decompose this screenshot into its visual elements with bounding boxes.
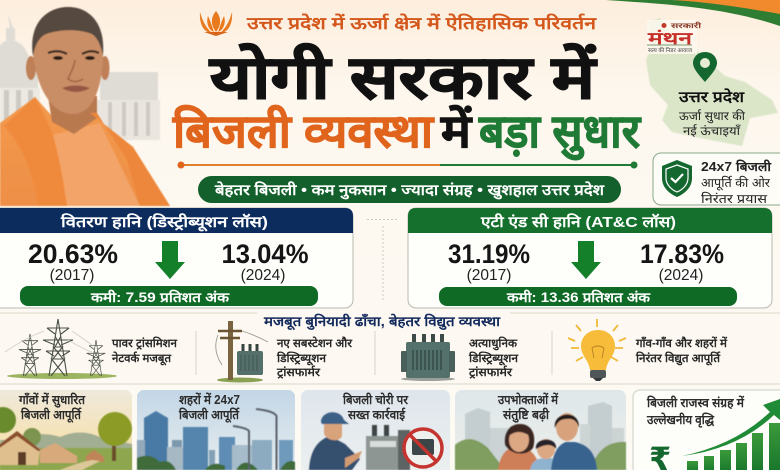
logo: sarkari manthan [647, 20, 703, 54]
text: substations [276, 336, 353, 379]
card text [646, 395, 745, 428]
title divider [178, 162, 638, 168]
stat 2024: (2024) [241, 267, 285, 284]
card: villages [0, 390, 132, 470]
robe [0, 97, 170, 206]
nose [68, 60, 83, 82]
text: substations: नए सबस्टेशन और [276, 336, 353, 350]
icon: modern transformer [401, 334, 455, 381]
card text: गाँवों में सुधारित [18, 392, 86, 408]
text: distribution transformer: डिस्ट्रिब्यूशन [468, 351, 519, 366]
title: में [440, 105, 473, 157]
subheading: उत्तर प्रदेश में ऊर्जा क्षेत्र में ऐतिहासिक परिवर्तन [246, 13, 597, 33]
icon: no theft sign [404, 429, 442, 467]
stat 2017 [448, 239, 530, 284]
card text: उपभोक्ताओं में [497, 392, 559, 407]
text: transmission network: नेटवर्क मजबूत [111, 351, 171, 366]
stat 2017: (2017) [50, 267, 94, 284]
map [646, 18, 778, 146]
stat 2024 [640, 239, 724, 284]
stat 2024: (2024) [659, 267, 703, 284]
arrow down [571, 241, 601, 279]
family scene [455, 402, 626, 470]
stat 2017: (2017) [467, 267, 511, 284]
icon: light bulb [568, 319, 626, 381]
text: transmission network [111, 336, 178, 366]
text: continuous supply: निरंतर विद्युत आपूर्ति [635, 351, 721, 366]
scarf bands [4, 97, 67, 206]
text: continuous supply: गाँव-गाँव और शहरों में [635, 336, 728, 350]
card text [18, 392, 86, 423]
text: substations: डिस्ट्रिब्यूशन [276, 351, 327, 366]
building sketch behind portrait [0, 14, 160, 140]
text: substations: ट्रांसफार्मर [276, 365, 321, 379]
stat 2024: 17.83% [640, 239, 724, 269]
panel: AT&C loss [408, 208, 772, 308]
stat 2017 [28, 239, 118, 284]
card text: बिजली आपूर्ति [178, 407, 240, 423]
kurta [53, 123, 140, 206]
24x7 supply callout [653, 153, 780, 206]
icon: shield [662, 160, 692, 197]
lotus logo [200, 11, 232, 36]
text: continuous supply [635, 336, 728, 366]
lineman and transformer [309, 412, 410, 470]
stat 2024 [222, 239, 308, 284]
panel: distribution loss [0, 208, 353, 308]
card text [497, 392, 559, 423]
text: distribution transformer: ट्रांसफार्मर [468, 365, 513, 379]
ears [26, 56, 36, 80]
logo: sarkari manthan: सरकारी [669, 21, 703, 30]
panel heading: वितरण हानि (डिस्ट्रीब्यूशन लॉस) [60, 213, 268, 232]
bar chart [687, 423, 780, 470]
card text: बिजली आपूर्ति [20, 407, 82, 423]
card text [178, 392, 240, 423]
tagline pill: बेहतर बिजली • कम नुकसान • ज्यादा संग्रह • खुशहाल उत्तर प्रदेश [214, 181, 605, 200]
24x7 supply callout: निरंतर प्रयास [701, 191, 768, 206]
panel: infrastructure [0, 313, 780, 384]
village scene [0, 407, 132, 470]
face [33, 7, 103, 114]
tagline pill [198, 176, 621, 203]
panel heading: एटी एंड सी हानि (AT&C लॉस) [480, 213, 676, 231]
card: consumers [455, 390, 626, 470]
title: बड़ा सुधार [478, 105, 642, 161]
hair [32, 7, 103, 56]
tricolour swoosh top right [606, 0, 780, 26]
neck [48, 96, 97, 134]
icon: transmission towers [5, 319, 117, 379]
24x7 supply callout: 24x7 बिजली [701, 159, 772, 174]
card: revenue [633, 390, 780, 470]
city scene [137, 409, 295, 470]
UP map with logo and label [646, 18, 778, 146]
growth arrow [682, 399, 780, 456]
stat 2024: 13.04% [222, 239, 308, 269]
card text: शहरों में 24x7 [179, 392, 240, 407]
title line 2: बिजली व्यवस्था [172, 105, 435, 157]
mouth [62, 86, 90, 92]
card text: उल्लेखनीय वृद्धि [646, 412, 715, 428]
brows and eyes [48, 51, 99, 54]
text: transmission network: पावर ट्रांसमिशन [111, 336, 178, 350]
icon: pole and transformer [216, 321, 268, 382]
title [172, 43, 642, 161]
logo: sarkari manthan: सत्य की निडर आवाज [648, 47, 693, 54]
map label: उत्तर प्रदेश [678, 88, 745, 106]
UP map with logo and label: नई ऊंचाइयाँ [683, 124, 741, 138]
stat 2017: 31.19% [448, 239, 530, 269]
card: electricity theft [301, 390, 450, 470]
card text: संतुष्टि बढ़ी [502, 407, 550, 423]
card text: बिजली चोरी पर [342, 392, 409, 407]
stat 2017: 20.63% [28, 239, 118, 269]
logo: sarkari manthan: मंथन [647, 29, 693, 48]
text: distribution transformer: अत्याधुनिक [469, 336, 518, 351]
title line 1: योगी सरकार में [209, 43, 598, 111]
card text [342, 392, 409, 422]
card text: बिजली राजस्व संग्रह में [646, 395, 745, 410]
24x7 supply callout: आपूर्ति की ओर [701, 175, 771, 191]
location pin [693, 52, 717, 82]
card text: सख्त कार्रवाई [347, 407, 406, 422]
reduction pill: कमी: 7.59 प्रतिशत अंक [90, 289, 230, 305]
reduction pill: कमी: 13.36 प्रतिशत अंक [506, 289, 651, 305]
reduction pill [439, 287, 737, 306]
text: distribution transformer [468, 336, 519, 379]
infrastructure heading: मजबूत बुनियादी ढाँचा, बेहतर विद्युत व्यवस्था [263, 313, 501, 331]
portrait of the chief minister [0, 7, 170, 206]
arrow down [155, 241, 185, 279]
UP map with logo and label: ऊर्जा सुधार की [679, 109, 746, 124]
card: cities [137, 390, 295, 470]
reduction pill [20, 286, 318, 306]
